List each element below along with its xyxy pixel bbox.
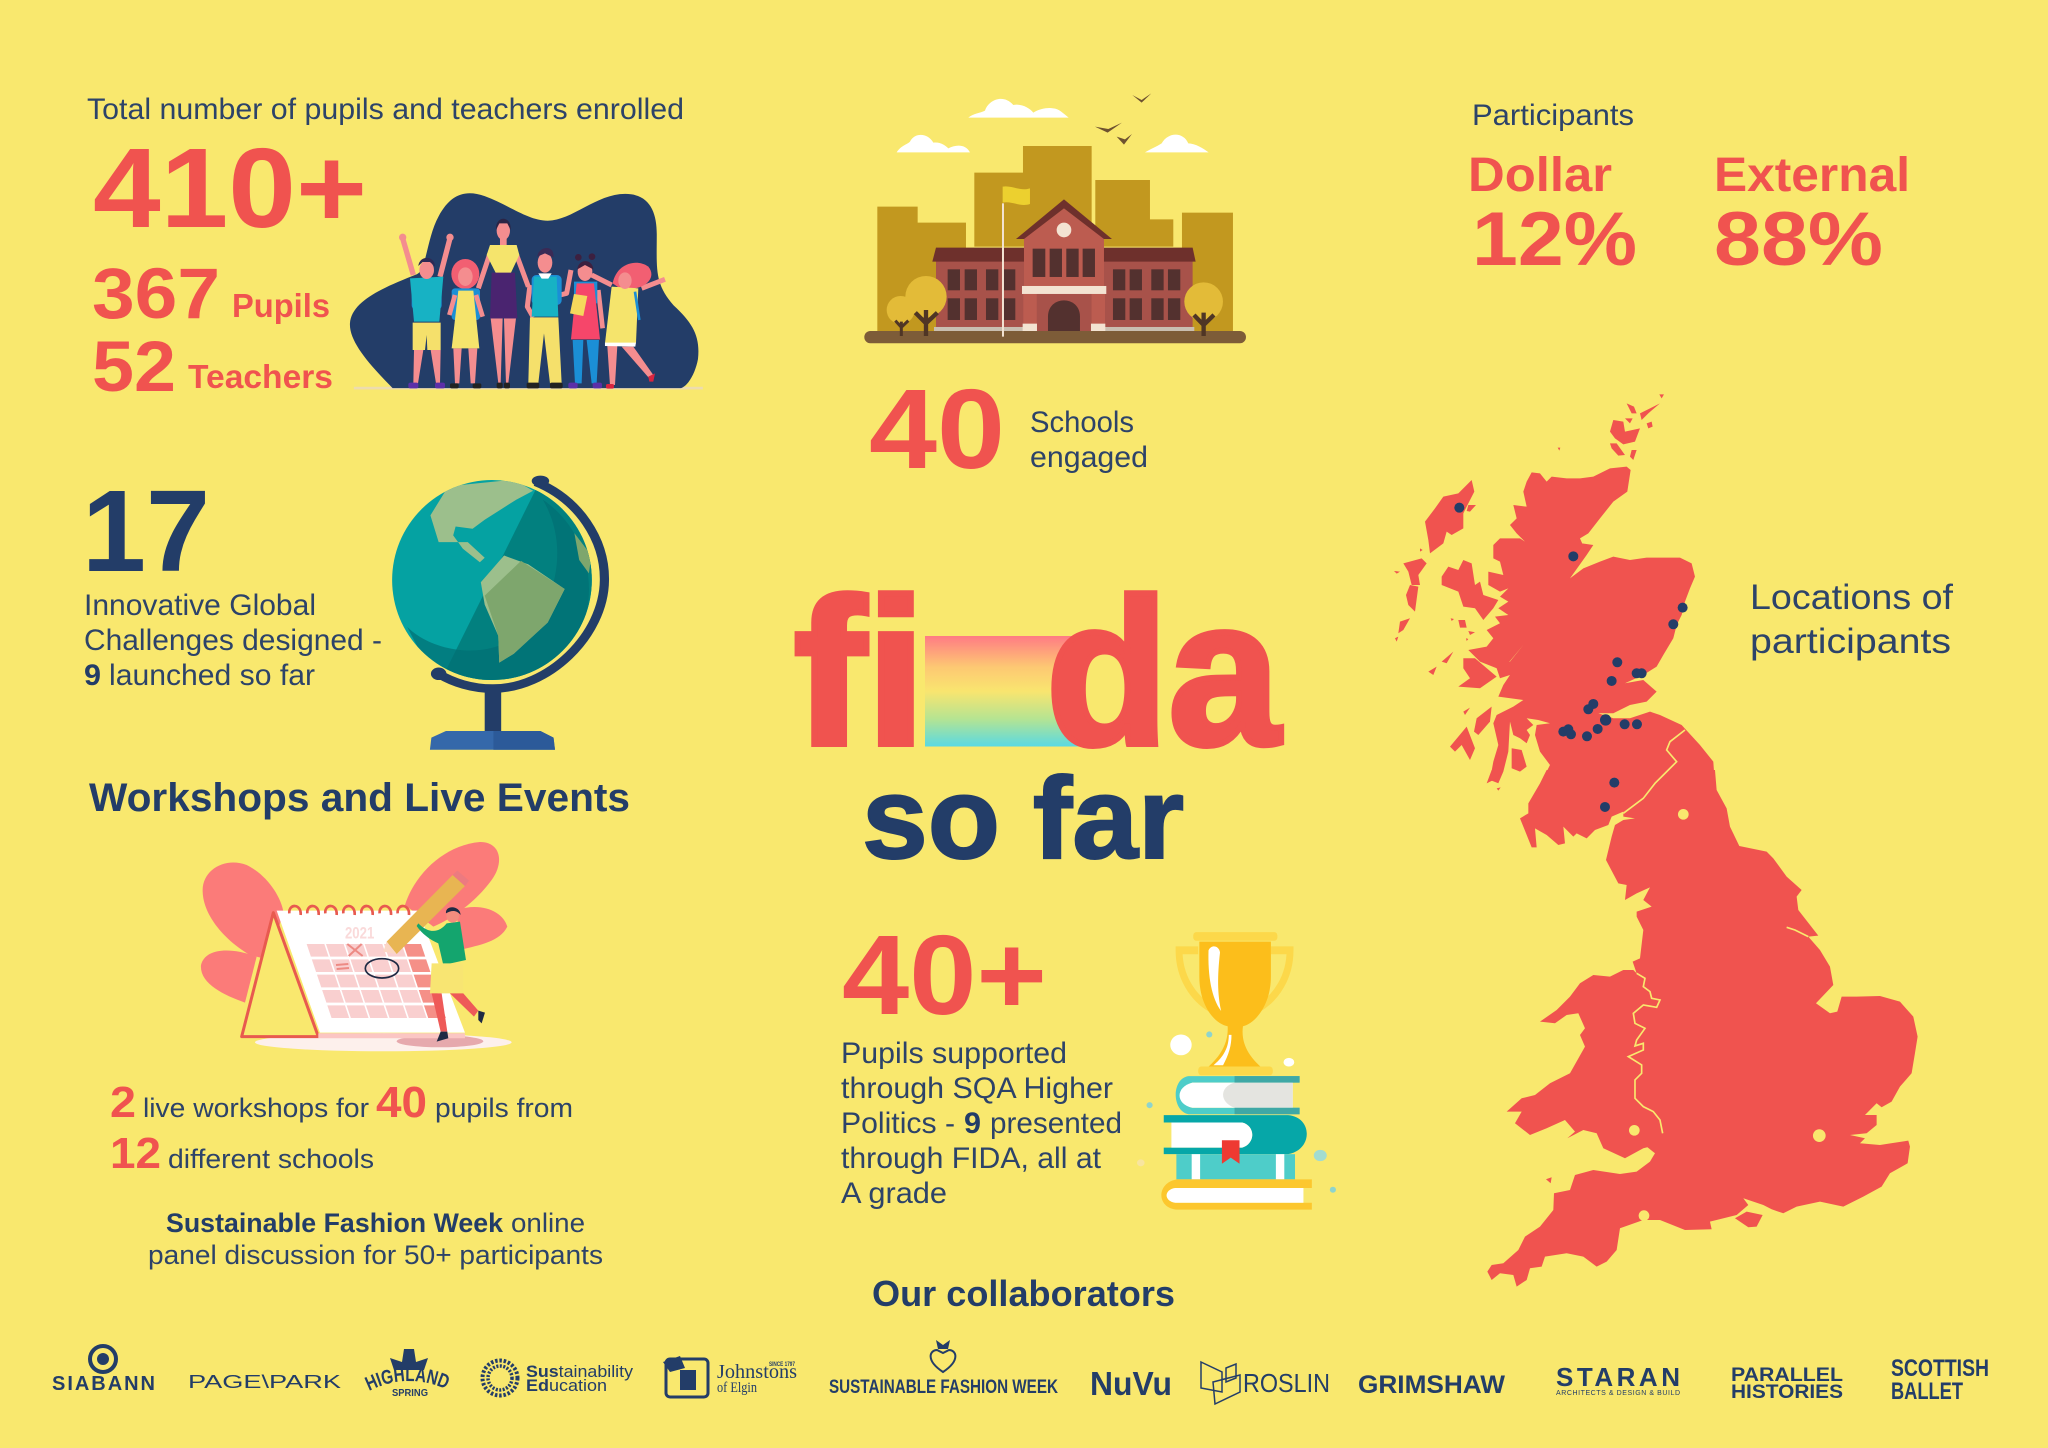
illustration: school building [864, 93, 1246, 343]
panel: SQA higher politics [841, 912, 1336, 1210]
background blob [350, 193, 703, 389]
number: 40 schools: 40 [869, 366, 1005, 492]
stat: external 88% [1714, 149, 1910, 282]
text: global challenges description: Challenges designed - [84, 624, 382, 657]
map: Scotland land [1394, 394, 1715, 785]
icon: trophy on books [1137, 932, 1336, 1210]
text: sustainable fashion week [148, 1208, 603, 1270]
logo: da: da [1046, 557, 1281, 789]
text: locations of participants: Locations of [1750, 578, 1953, 617]
heading: workshops and live events: Workshops and Live Events [89, 776, 630, 820]
panel: global challenges [82, 466, 604, 750]
logo: Siabann: SIABANN [52, 1373, 155, 1395]
text: live workshops: 2 [110, 1078, 136, 1127]
illustration: calendar with figure [201, 842, 512, 1051]
text: participants label: Participants [1472, 99, 1634, 132]
panel: schools engaged [864, 93, 1246, 492]
illustration: calendar with figure: 2021 [345, 923, 374, 942]
text: live workshops: pupils from [435, 1093, 573, 1123]
logo row: collaborators [52, 1340, 1989, 1406]
text: locations of participants [1750, 578, 1953, 661]
logo: Sustainability Education [482, 1360, 634, 1396]
panel: workshops and live events [89, 776, 630, 1270]
text: live workshops: different schools [168, 1144, 374, 1174]
heading: so far: so far [862, 753, 1184, 883]
stat: dollar 12% [1468, 149, 1637, 282]
text: sustainable fashion week: online [511, 1208, 585, 1238]
figure: teacher [478, 219, 528, 388]
text: sustainable fashion week: panel discussion for 50+ participants [148, 1240, 603, 1270]
text: locations of participants: participants [1750, 622, 1951, 661]
number: 52 teachers: 52 [92, 328, 176, 407]
figure: girl in pink [568, 253, 603, 388]
text: live workshops: live workshops for [143, 1093, 369, 1123]
logo: Sustainable Fashion Week [829, 1340, 1058, 1398]
figure: boy with raised arms [399, 234, 454, 388]
text: global challenges description [84, 589, 382, 692]
text: SQA description: Pupils supported [841, 1037, 1067, 1070]
text: schools engaged: Schools [1030, 406, 1134, 439]
stat: dollar 12%: Dollar [1468, 149, 1612, 202]
text: SQA description: presented [990, 1107, 1122, 1140]
text: global challenges description: Innovative Global [84, 589, 316, 622]
text: global challenges description: launched so far [109, 659, 315, 692]
text: SQA description: through SQA Higher [841, 1072, 1113, 1105]
figures [399, 219, 665, 389]
logo: Highland Spring: SPRING [392, 1388, 428, 1399]
logo: fi: fi [794, 557, 926, 789]
calendar grid [307, 944, 446, 1018]
text: SQA description: 9 [964, 1107, 981, 1140]
logo: Siabann [52, 1346, 155, 1395]
text: sustainable fashion week: Sustainable Fashion Week [166, 1208, 504, 1238]
logo: Sustainable Fashion Week: SUSTAINABLE FASHION WEEK [829, 1377, 1058, 1398]
figure: boy in teal shirt [527, 248, 571, 388]
number: 410+: 410+ [93, 125, 367, 251]
text: schools engaged [1030, 406, 1148, 474]
logo: Parallel Histories [1731, 1365, 1843, 1403]
map: England and Wales land [1487, 730, 1918, 1287]
panel: participants split [1468, 99, 1910, 282]
number: 367 pupils: 367 [92, 255, 220, 334]
text: SQA description: Politics - [841, 1107, 955, 1140]
number: 367 pupils: Pupils [232, 287, 330, 324]
logo: Staran: STARAN [1556, 1362, 1680, 1392]
logo: Johnstons of Elgin: of Elgin [717, 1380, 757, 1396]
logo: Parallel Histories: PARALLEL [1731, 1365, 1843, 1386]
text: global challenges description: 9 [84, 659, 101, 692]
logo: Page\Park: PAGE\PARK [188, 1372, 341, 1392]
text: enrolment heading: Total number of pupils and teachers enrolled [87, 93, 684, 126]
text: SQA description [841, 1037, 1122, 1210]
map: UK participant locations [1394, 394, 1918, 1287]
logo: Scottish Ballet: BALLET [1891, 1378, 1963, 1405]
stat: external 88%: 88% [1714, 197, 1883, 282]
text: SQA description: through FIDA, all at [841, 1142, 1102, 1175]
text: schools engaged: engaged [1030, 441, 1148, 474]
map: borders [1623, 730, 1808, 1133]
panel: enrolment [87, 93, 703, 407]
logo: Staran: ARCHITECTS & DESIGN & BUILD [1556, 1390, 1680, 1397]
logo: Johnstons of Elgin: Johnstons [717, 1361, 797, 1383]
logo: Sustainability Education: Education [526, 1376, 607, 1395]
title: fida so far [794, 557, 1281, 883]
heading: our collaborators: Our collaborators [872, 1273, 1175, 1314]
number: 40+: 40+ [842, 912, 1047, 1038]
text: live workshops [110, 1078, 573, 1178]
number: 367 pupils [92, 255, 330, 334]
number: 17: 17 [82, 466, 210, 596]
logo: Roslin: ROSLIN [1243, 1368, 1330, 1398]
logo: Highland Spring [364, 1349, 449, 1399]
logo: Roslin [1201, 1362, 1330, 1404]
text: live workshops: 40 [376, 1078, 427, 1127]
logo: Parallel Histories: HISTORIES [1731, 1382, 1843, 1403]
text: SQA description: A grade [841, 1177, 947, 1210]
logo: Grimshaw: GRIMSHAW [1358, 1371, 1505, 1399]
illustration: pupils and teacher group [350, 193, 703, 389]
logo: Scottish Ballet [1891, 1355, 1989, 1405]
map: other location dots [1629, 809, 1826, 1221]
logo: Highland Spring: HIGHLAND [364, 1368, 449, 1390]
logo: Scottish Ballet: SCOTTISH [1891, 1355, 1989, 1382]
figure: girl in yellow dress [449, 259, 483, 388]
figure: jumping girl [592, 263, 665, 389]
number: 52 teachers [92, 328, 333, 407]
logo: NuVu: NuVu [1090, 1365, 1172, 1402]
stat: dollar 12%: 12% [1472, 197, 1637, 282]
logo: Johnstons of Elgin [663, 1356, 797, 1397]
text: live workshops: 12 [110, 1129, 161, 1178]
map: participant dots [1454, 503, 1688, 812]
icon: globe [392, 475, 604, 750]
logo: Johnstons of Elgin: SINCE 1797 [769, 1362, 796, 1368]
logo: Sustainability Education: Sustainability [526, 1362, 634, 1381]
logo: gradient bar [925, 636, 1097, 746]
stat: external 88%: External [1714, 149, 1910, 202]
number: 52 teachers: Teachers [188, 358, 333, 395]
